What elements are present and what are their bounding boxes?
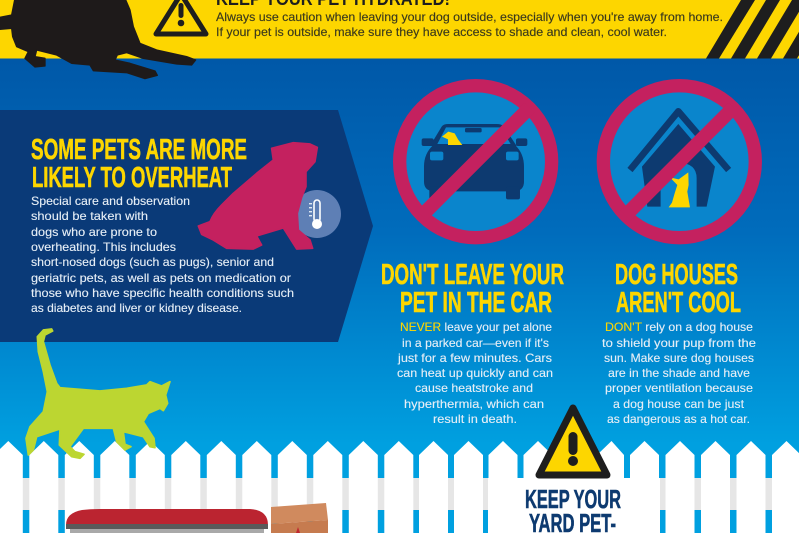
yellow chihuahua bbox=[669, 172, 690, 207]
yellow dog bbox=[442, 132, 462, 145]
banner text: If your pet is outside, make sure they have access to shade and clean, cool water. bbox=[216, 25, 667, 39]
column: don't leave your pet in the car bbox=[381, 259, 564, 426]
fence rail bbox=[0, 478, 799, 510]
body text: hyperthermia, which can bbox=[404, 397, 544, 411]
body text: proper ventilation because bbox=[605, 381, 753, 395]
icon: cardboard box bbox=[271, 503, 328, 533]
body text: as dangerous as a hot car. bbox=[607, 412, 750, 426]
body text: as diabetes and liver or kidney disease. bbox=[31, 301, 242, 315]
icon: large warning triangle bbox=[539, 408, 607, 475]
dog house bbox=[630, 111, 729, 207]
body text: should be taken with bbox=[31, 209, 148, 223]
body text: those who have specific health conditions such bbox=[31, 286, 294, 300]
heading: keep your yard pet-friendly: KEEP YOUR bbox=[525, 484, 621, 514]
body text: NEVER leave your pet alone bbox=[400, 320, 552, 334]
icon: red tray bbox=[66, 509, 268, 533]
heading: keep your yard pet-friendly bbox=[525, 484, 621, 533]
heading bbox=[31, 134, 247, 194]
icon: thermometer badge bbox=[293, 190, 341, 238]
prohibition ring bbox=[400, 86, 552, 238]
panel: some pets overheat bbox=[0, 110, 373, 342]
heading bbox=[381, 259, 564, 319]
body text: dogs who are prone to bbox=[31, 225, 157, 239]
icon: pug silhouette bbox=[198, 143, 317, 249]
white picket fence bbox=[0, 441, 799, 533]
body text: to shield your pup from the bbox=[602, 336, 756, 350]
hazard stripes bbox=[706, 0, 799, 58]
body text: just for a few minutes. Cars bbox=[397, 351, 552, 365]
body text bbox=[31, 194, 294, 315]
icon: green cat silhouette bbox=[26, 329, 170, 458]
headlights bbox=[430, 152, 519, 160]
heading: LIKELY TO OVERHEAT bbox=[32, 162, 232, 194]
icon: warning triangle bbox=[156, 0, 206, 34]
car bbox=[422, 124, 527, 199]
body text: result in death. bbox=[433, 412, 517, 426]
body text: are in the shade and have bbox=[608, 366, 750, 380]
body text: short-nosed dogs (such as pugs), senior and bbox=[31, 255, 274, 269]
heading: PET IN THE CAR bbox=[400, 287, 552, 319]
heading: SOME PETS ARE MORE bbox=[31, 134, 247, 166]
prohibition ring bbox=[603, 86, 755, 238]
column: dog houses aren't cool bbox=[602, 259, 756, 426]
body text: in a parked car—even if it's bbox=[402, 336, 549, 350]
body text: a dog house can be just bbox=[613, 397, 745, 411]
heading bbox=[615, 259, 741, 319]
icon: no dogs in car bbox=[400, 86, 552, 238]
body text: DON'T rely on a dog house bbox=[605, 320, 753, 334]
body text bbox=[397, 320, 553, 426]
body text bbox=[602, 320, 756, 426]
body text: can heat up quickly and can bbox=[397, 366, 553, 380]
banner text: Always use caution when leaving your dog outside, especially when you're away from home. bbox=[216, 10, 723, 24]
icon: no dog house bbox=[603, 86, 755, 238]
body text: geriatric pets, as well as pets on medication or bbox=[31, 271, 291, 285]
body text: sun. Make sure dog houses bbox=[604, 351, 754, 365]
body text: cause heatstroke and bbox=[415, 381, 533, 395]
icon: black dog silhouette bbox=[0, 0, 196, 79]
panel: top hydration banner bbox=[0, 0, 799, 58]
body text: overheating. This includes bbox=[31, 240, 176, 254]
heading: DON'T LEAVE YOUR bbox=[381, 259, 564, 291]
banner text bbox=[216, 10, 723, 39]
body text: Special care and observation bbox=[31, 194, 190, 208]
